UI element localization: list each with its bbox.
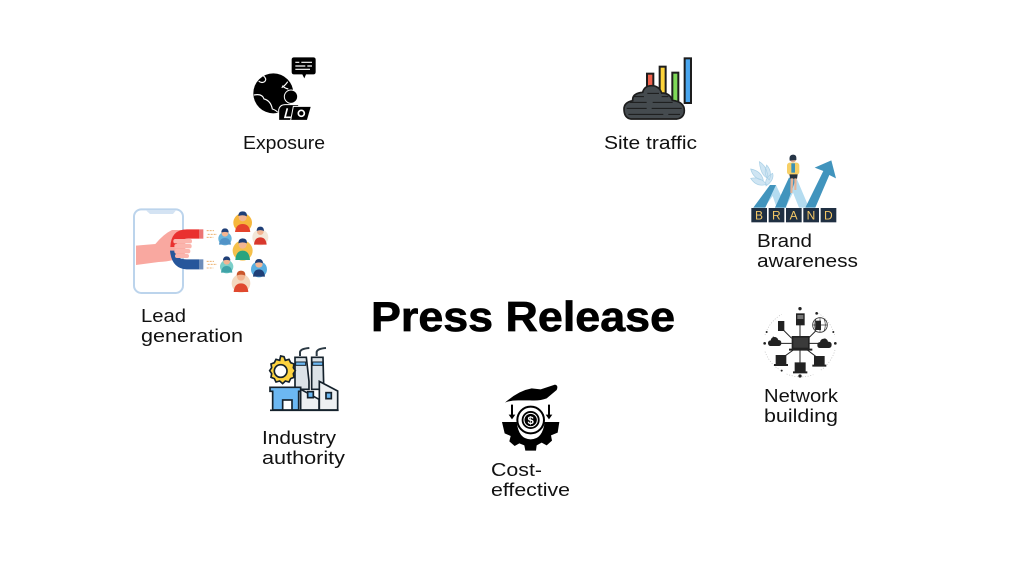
label: brand awareness: awareness <box>757 250 858 271</box>
label: cost-effective: effective <box>491 479 570 500</box>
icon: brand awareness arrow and blocks: N <box>807 209 815 223</box>
icon: network of computers <box>763 307 837 378</box>
icon: brand awareness arrow and blocks <box>751 155 836 223</box>
label: network building <box>764 385 839 426</box>
label: lead generation <box>141 305 243 346</box>
label: network building: building <box>764 405 838 426</box>
icon: brand awareness arrow and blocks: B <box>755 209 763 223</box>
label: cost-effective <box>491 459 570 500</box>
label: cost-effective: Cost- <box>491 459 542 480</box>
label: lead generation: Lead <box>141 305 186 326</box>
label: industry authority <box>262 427 346 468</box>
icon: cost-effective hand, coin and gear <box>502 385 559 451</box>
label: industry authority: Industry <box>262 427 337 448</box>
icon: brand awareness arrow and blocks: R <box>772 209 781 223</box>
icon: brand awareness arrow and blocks: A <box>790 209 798 223</box>
label: lead generation: generation <box>141 325 243 346</box>
label: brand awareness <box>757 230 858 271</box>
title: Press Release <box>371 293 675 340</box>
icon: cost-effective hand, coin and gear: $ <box>528 415 535 427</box>
icon: lead generation phone, magnet and people <box>134 209 268 293</box>
icon: brand awareness arrow and blocks: D <box>824 209 833 223</box>
label: site traffic: Site traffic <box>604 132 697 153</box>
icon: site traffic cloud with bars <box>624 58 691 119</box>
label: brand awareness: Brand <box>757 230 812 251</box>
label: network building: Network <box>764 385 839 406</box>
label: exposure: Exposure <box>243 132 325 153</box>
icon: industry factory with gear <box>270 348 339 410</box>
icon: exposure globe, person and chat bubble <box>253 57 316 120</box>
label: industry authority: authority <box>262 447 346 468</box>
